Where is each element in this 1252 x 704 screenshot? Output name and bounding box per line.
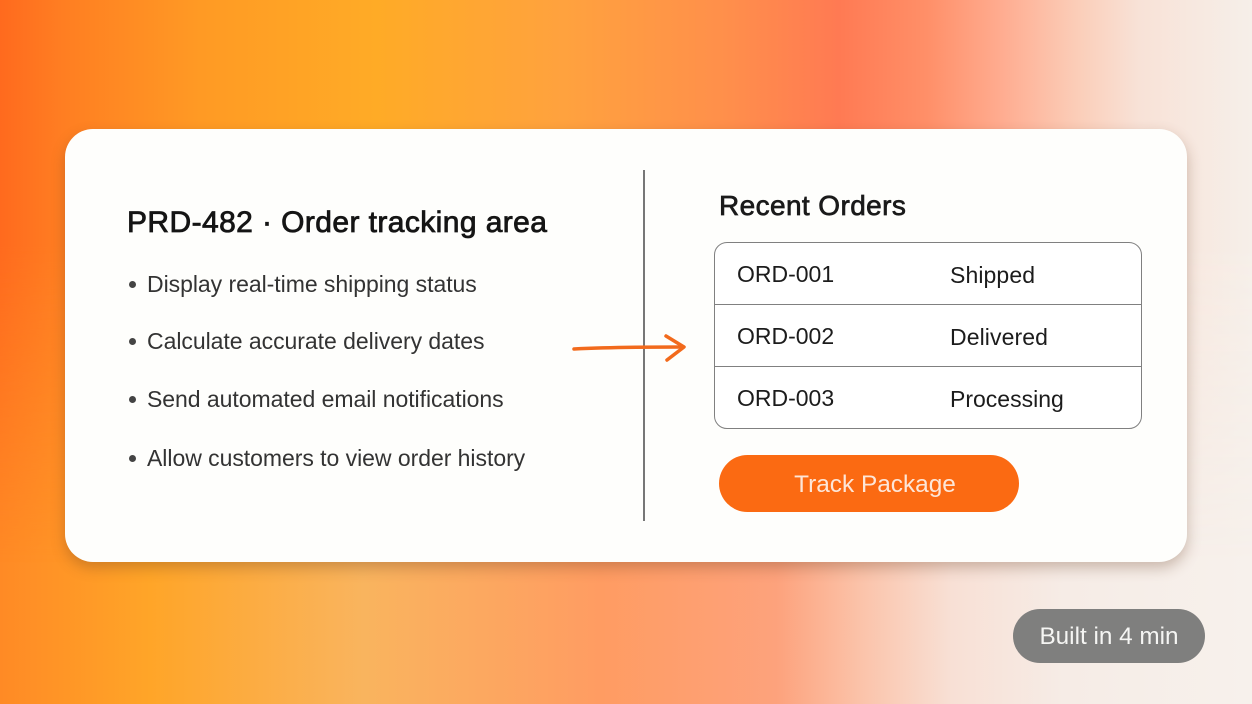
row 1 (715, 243, 1141, 305)
vertical divider (643, 170, 645, 521)
bullet 2: Calculate accurate delivery dates (147, 328, 484, 354)
row 1: Shipped (950, 262, 1035, 288)
row 2: ORD-002 (737, 323, 834, 349)
row 2 (715, 305, 1141, 367)
row 3 (737, 385, 1064, 412)
bullet 4: Allow customers to view order history (147, 445, 525, 471)
requirements list (129, 271, 525, 471)
row 2: Delivered (950, 324, 1048, 350)
bullet 1: Display real-time shipping status (147, 271, 477, 297)
badge: Built in 4 min (1013, 609, 1205, 663)
button: Track Package (719, 455, 1019, 512)
orders table (714, 242, 1142, 429)
row 3: ORD-003 (737, 385, 834, 411)
arrow (572, 334, 686, 362)
row 1: ORD-001 (737, 261, 834, 287)
badge: Built in 4 min: Built in 4 min (1039, 623, 1179, 650)
bullet 3: Send automated email notifications (147, 386, 504, 412)
main card (65, 129, 1187, 562)
heading: PRD title: PRD-482 · Order tracking area (127, 206, 547, 239)
heading: Recent Orders: Recent Orders (719, 190, 906, 221)
row 3: Processing (950, 386, 1064, 412)
button: Track Package: Track Package (794, 471, 956, 498)
